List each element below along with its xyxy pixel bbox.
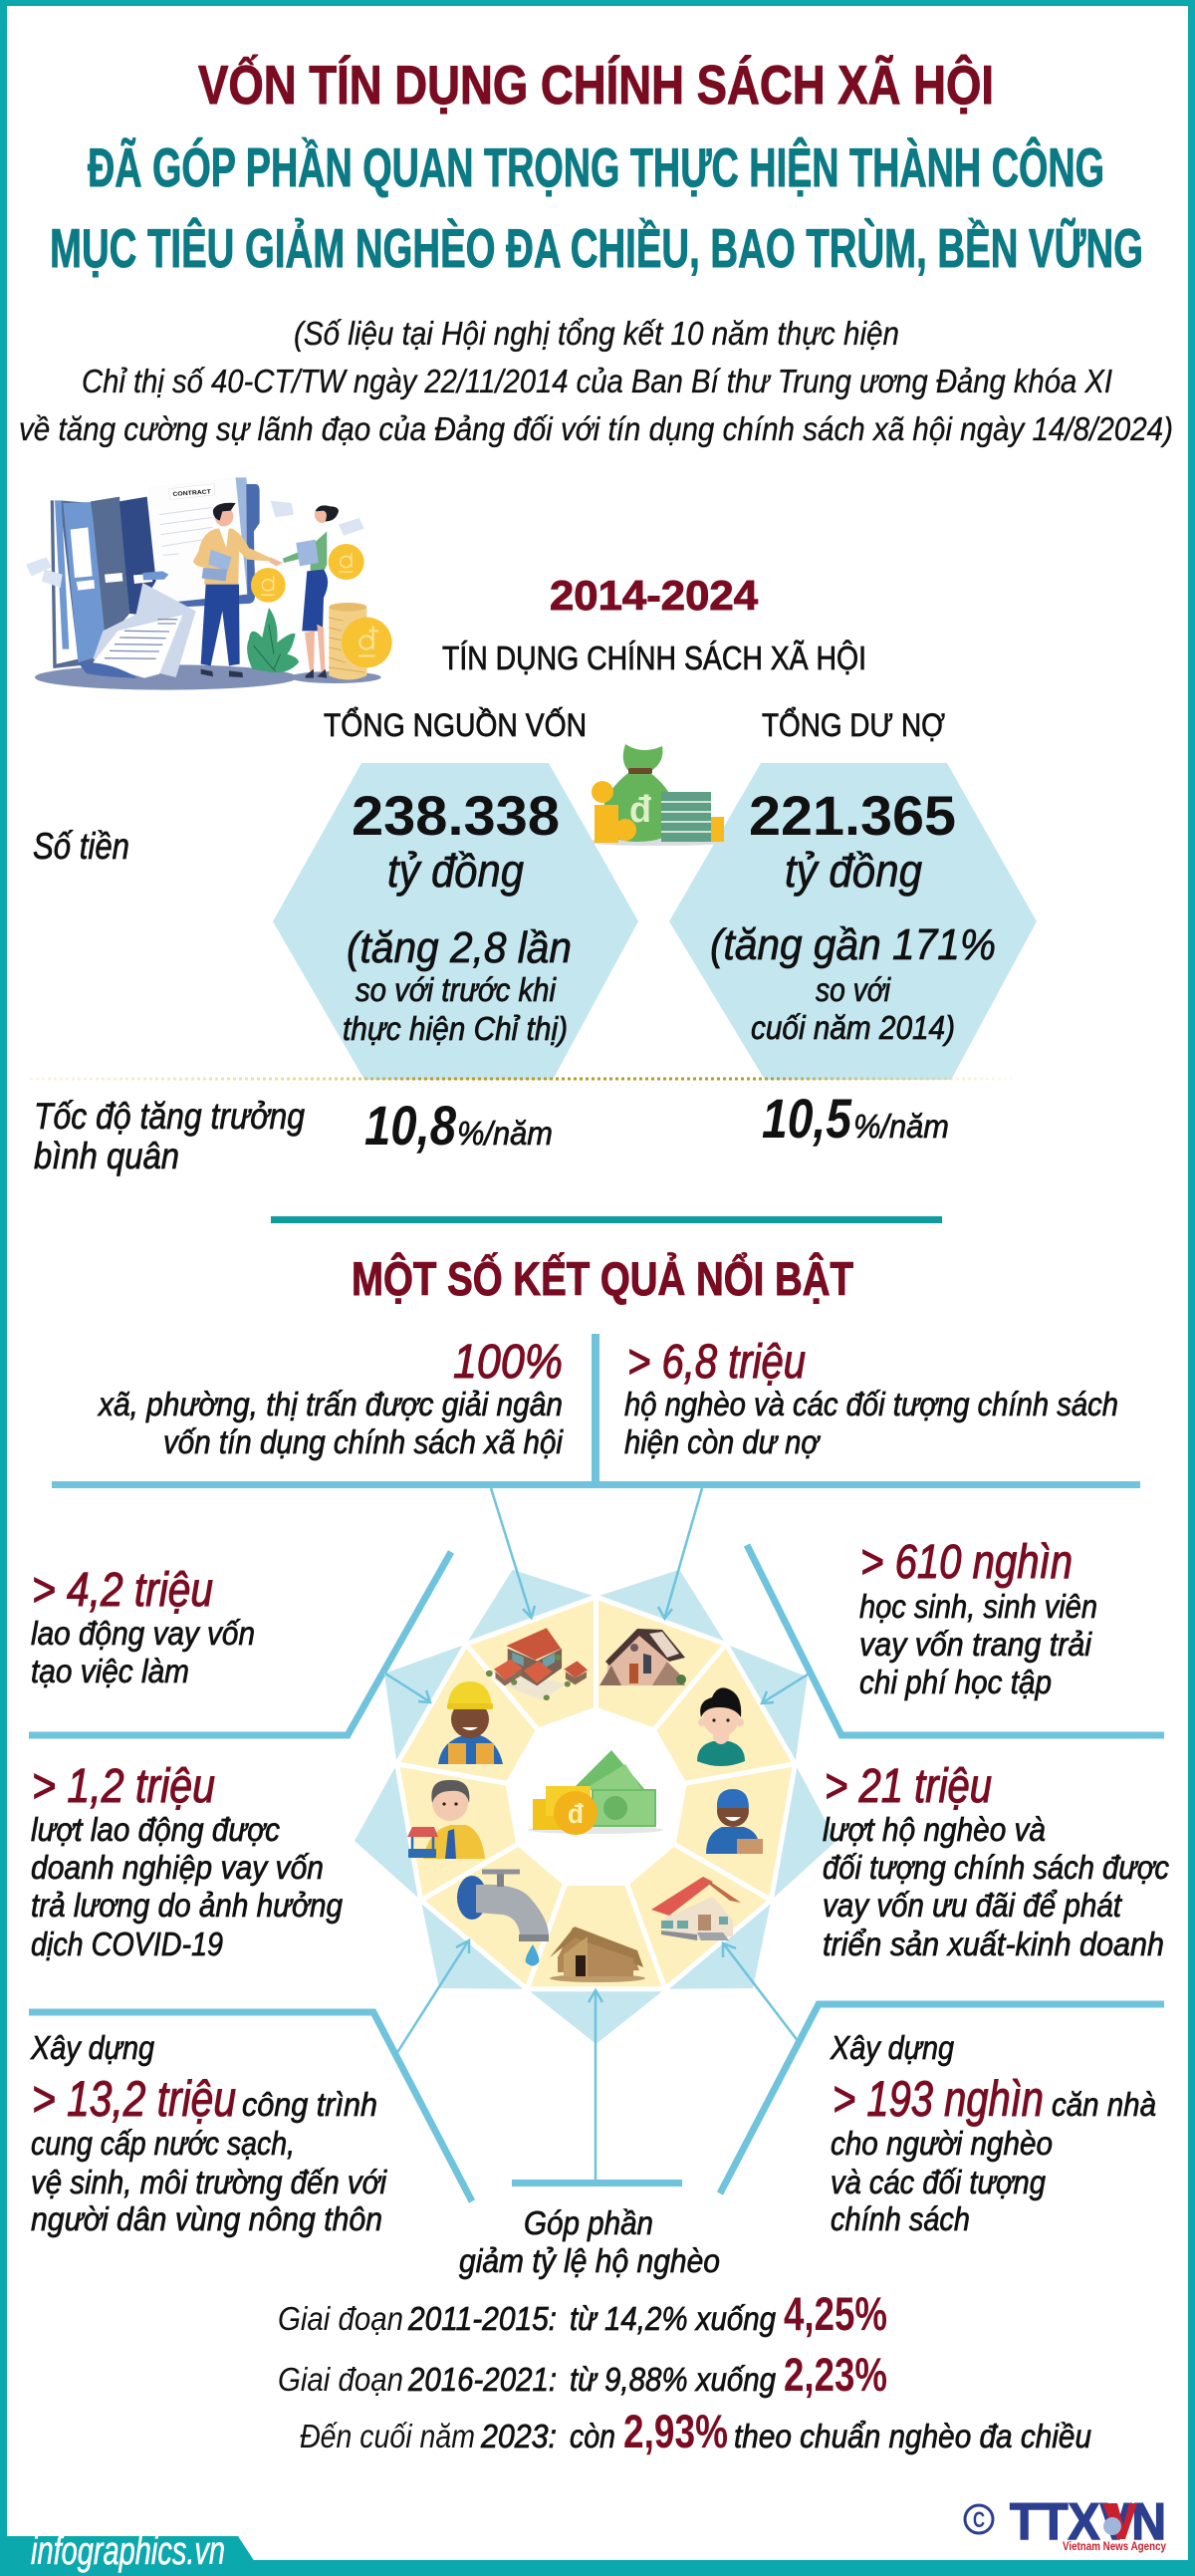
subtitle source note: [19, 315, 1173, 447]
callout: 6.8 million households: hộ nghèo và các đối tượng chính sách: [624, 1386, 1118, 1422]
callout: 610 thousand students: học sinh, sinh viên: [859, 1588, 1097, 1625]
panel: total capital: (tăng 2,8 lần: [347, 923, 572, 972]
icon: red-roofed house: [651, 1877, 741, 1940]
panel: total outstanding debt: cuối năm 2014): [751, 1009, 955, 1046]
icon: contract handshake illustration: [26, 477, 392, 690]
callout: 21 million households: [823, 1760, 1169, 1962]
panel: total outstanding debt: 221.365: [749, 784, 956, 847]
callout: 610 thousand students: vay vốn trang trải: [859, 1626, 1093, 1663]
panel: total capital: so với trước khi: [356, 971, 557, 1008]
callout: 193 thousand houses: [830, 2029, 1156, 2237]
callout: 193 thousand houses: căn nhà: [1052, 2086, 1156, 2123]
logo: TTXVN: TTXVN: [1010, 2493, 1166, 2551]
text block: poverty rate 2011-2015: từ 14,2% xuống: [570, 2300, 777, 2337]
callout: poverty reduction heading: Góp phần: [524, 2204, 653, 2241]
text block: poverty rate 2011-2015: [278, 2287, 887, 2340]
callout: 21 million households: vay vốn ưu đãi để phát: [823, 1887, 1123, 1924]
callout: 6.8 million households: [624, 1336, 1118, 1460]
callout: 21 million households: lượt hộ nghèo và: [823, 1811, 1046, 1848]
callout: 6.8 million households: hiện còn dư nợ: [624, 1423, 822, 1460]
callout: 21 million households: > 21 triệu: [825, 1760, 992, 1813]
logo: TTXVN: C: [973, 2507, 985, 2532]
callout: 1.2 million covid loans: [31, 1760, 344, 1962]
title: [50, 54, 1143, 279]
panel: total capital: TỔNG NGUỒN VỐN: [324, 707, 587, 743]
callout: 1.2 million covid loans: dịch COVID-19: [31, 1926, 223, 1962]
callout: 100 percent of communes: 100%: [453, 1336, 563, 1389]
row label: average growth: Tốc độ tăng trưởng: [34, 1096, 305, 1137]
stat: capital growth: 10,8: [364, 1094, 457, 1157]
stat: debt growth: %/năm: [853, 1108, 949, 1145]
callout: 6.8 million households: > 6,8 triệu: [627, 1336, 806, 1389]
chart: nine-part wheel: [355, 1570, 836, 2044]
stat: debt growth: [762, 1087, 949, 1150]
row label: average growth: bình quân: [34, 1136, 179, 1176]
callout: 100 percent of communes: vốn tín dụng chính sách xã hội: [163, 1423, 564, 1460]
footer band: infographics.vn: [31, 2529, 225, 2573]
text block: poverty rate end of 2023: [300, 2405, 1091, 2457]
icon: damaged house: [599, 1629, 686, 1685]
callout: 13.2 million sanitation works: Xây dựng: [30, 2029, 155, 2066]
icon: contract handshake illustration: CONTRACT: [172, 489, 211, 498]
panel: total outstanding debt: [669, 707, 1037, 1080]
frame lines: [29, 1334, 1164, 2201]
callout: 610 thousand students: [859, 1536, 1097, 1700]
callout: 193 thousand houses: và các đối tượng: [831, 2164, 1047, 2200]
icon: delivery man: [706, 1789, 763, 1854]
callout: 4.2 million workers: [31, 1564, 255, 1689]
logo: TTXVN: Vietnam News Agency: [1063, 2539, 1166, 2553]
row label: amount: Số tiền: [33, 826, 129, 867]
text block: poverty rate 2016-2021: [278, 2348, 887, 2401]
callout: 13.2 million sanitation works: người dân vùng nông thôn: [31, 2200, 382, 2237]
heading: social policy credit: TÍN DỤNG CHÍNH SÁCH XÃ HỘI: [442, 640, 866, 676]
heading: highlights: MỘT SỐ KẾT QUẢ NỔI BẬT: [352, 1252, 853, 1305]
panel: total capital: 238.338: [352, 784, 560, 847]
callout: 13.2 million sanitation works: [30, 2029, 387, 2237]
subtitle source note: (Số liệu tại Hội nghị tổng kết 10 năm thực hiện: [294, 315, 899, 352]
row label: average growth: [34, 1096, 305, 1176]
stat: debt growth: 10,5: [762, 1087, 852, 1150]
text block: poverty rate end of 2023: 2,93%: [623, 2405, 728, 2457]
icon: student: [697, 1687, 745, 1766]
panel: total outstanding debt: so với: [816, 971, 891, 1008]
heading: period: 2014-2024: [550, 572, 759, 619]
footer band: [0, 2529, 1195, 2576]
stat: capital growth: [364, 1094, 553, 1157]
text block: poverty rate end of 2023: còn: [570, 2418, 615, 2454]
callout: 193 thousand houses: cho người nghèo: [831, 2125, 1053, 2162]
panel: total capital: tỷ đồng: [387, 845, 524, 897]
icon: shop owner: [407, 1780, 485, 1859]
icon: money at wheel centre: [528, 1750, 663, 1835]
icon: money at wheel centre: đ: [568, 1798, 584, 1829]
text block: poverty rate 2011-2015: 2011-2015:: [407, 2300, 557, 2337]
text block: poverty rate end of 2023: theo chuẩn nghèo đa chiều: [734, 2418, 1091, 2454]
text block: poverty rate 2016-2021: Giai đoạn: [278, 2361, 403, 2398]
text block: poverty rate end of 2023: 2023:: [480, 2418, 557, 2454]
callout: 1.2 million covid loans: lượt lao động được: [31, 1811, 280, 1848]
icon: construction worker: [438, 1681, 503, 1764]
icon: thatched hut: [550, 1927, 645, 1982]
callout: 193 thousand houses: chính sách: [831, 2200, 970, 2237]
text block: poverty rate 2016-2021: từ 9,88% xuống: [570, 2361, 777, 2398]
icon: villa: [486, 1628, 588, 1700]
callout: 13.2 million sanitation works: vệ sinh, môi trường đến với: [31, 2164, 387, 2200]
callout: 610 thousand students: > 610 nghìn: [860, 1536, 1073, 1589]
icon: money bag: đ: [629, 789, 652, 831]
callout: poverty reduction heading: giảm tỷ lệ hộ nghèo: [459, 2242, 720, 2279]
arrows to wheel: [385, 1488, 808, 2180]
icon: money bag: [587, 744, 730, 846]
title: VỐN TÍN DỤNG CHÍNH SÁCH XÃ HỘI: [198, 54, 994, 116]
callout: 610 thousand students: chi phí học tập: [859, 1664, 1052, 1700]
panel: total capital: [273, 707, 638, 1080]
text block: poverty rate end of 2023: Đến cuối năm: [300, 2418, 475, 2454]
text block: poverty rate 2011-2015: 4,25%: [784, 2287, 887, 2340]
callout: 4.2 million workers: tạo việc làm: [31, 1653, 189, 1689]
callout: 100 percent of communes: [97, 1336, 564, 1460]
icon: water faucet: [457, 1872, 549, 1966]
text block: poverty rate 2011-2015: Giai đoạn: [278, 2300, 403, 2337]
callout: 13.2 million sanitation works: công trình: [242, 2086, 377, 2123]
callout: 13.2 million sanitation works: cung cấp nước sạch,: [31, 2125, 295, 2162]
callout: 193 thousand houses: > 193 nghìn: [833, 2071, 1044, 2127]
callout: 21 million households: triển sản xuất-kinh doanh: [823, 1926, 1164, 1962]
callout: 4.2 million workers: > 4,2 triệu: [32, 1564, 213, 1617]
callout: 1.2 million covid loans: doanh nghiệp vay vốn: [31, 1849, 324, 1886]
callout: 1.2 million covid loans: > 1,2 triệu: [32, 1760, 215, 1813]
panel: total outstanding debt: (tăng gần 171%: [710, 920, 996, 969]
stat: capital growth: %/năm: [457, 1115, 553, 1152]
text block: poverty rate 2016-2021: 2,23%: [784, 2348, 887, 2401]
panel: total capital: thực hiện Chỉ thị): [343, 1010, 568, 1047]
callout: 100 percent of communes: xã, phường, thị trấn được giải ngân: [97, 1386, 563, 1422]
callout: 4.2 million workers: lao động vay vốn: [31, 1615, 255, 1652]
callout: poverty reduction heading: [459, 2204, 720, 2279]
panel: total outstanding debt: TỔNG DƯ NỢ: [762, 707, 945, 743]
callout: 1.2 million covid loans: trả lương do ảnh hưởng: [31, 1887, 344, 1924]
panel: total outstanding debt: tỷ đồng: [785, 845, 922, 897]
callout: 193 thousand houses: Xây dựng: [830, 2029, 955, 2066]
text block: poverty rate 2016-2021: 2016-2021:: [407, 2361, 557, 2398]
callout: 13.2 million sanitation works: > 13,2 triệu: [32, 2071, 236, 2127]
